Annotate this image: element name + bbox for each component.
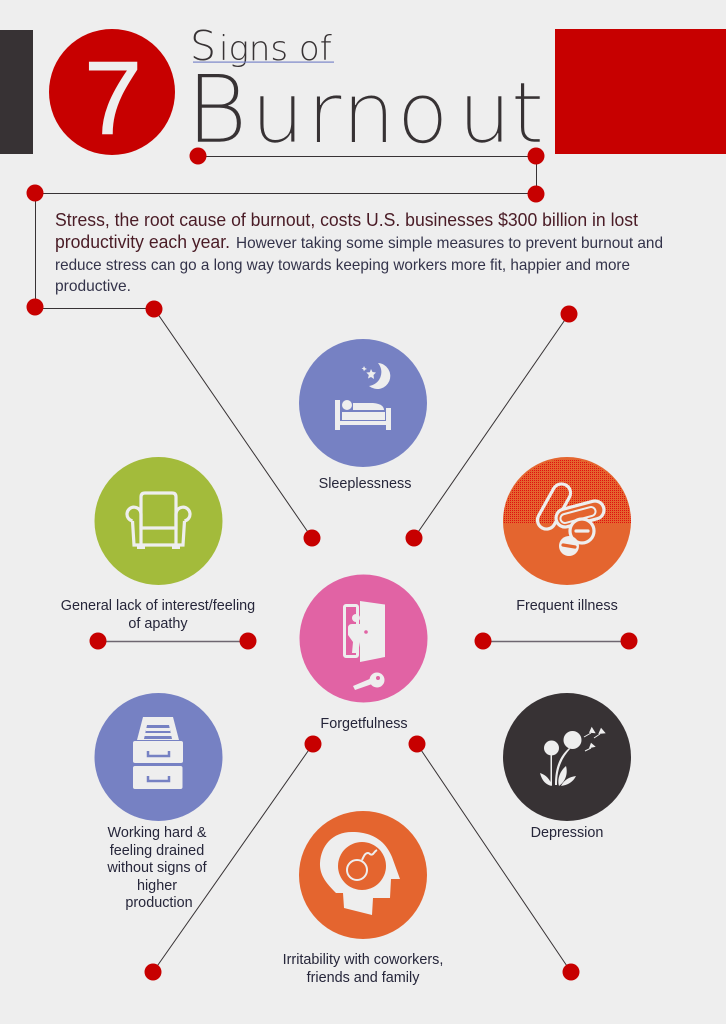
icon: pills [534,481,606,556]
intro paragraph: productive. [55,278,131,295]
label: Forgetfulness [320,716,408,732]
intro paragraph [55,210,663,295]
icon: head with bomb [320,832,400,915]
label: higher [137,878,177,894]
intro paragraph: However taking some simple measures to prevent burnout and [236,235,663,252]
icon: armchair [127,493,190,547]
sign: sleeplessness [299,339,427,492]
icon: file drawers [133,717,183,789]
title [186,22,544,165]
title: S [190,22,216,70]
sign: irritability [283,811,443,986]
label: friends and family [307,970,420,986]
label [106,825,208,911]
label: Irritability with coworkers, [283,952,443,968]
label [283,952,443,986]
connector lines [36,156,629,972]
title: urnout [251,64,544,162]
title: igns of [219,29,332,69]
intro paragraph: Stress, the root cause of burnout, costs U.S. businesses $300 billion in lost [55,210,638,230]
intro paragraph: reduce stress can go a long way towards keeping workers more fit, happier and more [55,257,630,274]
sign: forgetfulness [300,574,428,732]
label: without signs of [106,860,208,876]
label: production [125,895,193,911]
intro paragraph: productivity each year. [55,232,230,252]
right red block [555,29,726,154]
sign: working hard [94,693,222,911]
label [61,598,255,632]
sign: frequent illness [503,457,631,614]
label: General lack of interest/feeling [61,598,255,614]
label: Working hard & [108,825,207,841]
number seven badge: 7 [84,41,142,157]
sign: depression [503,693,631,841]
left dark bar [0,30,33,154]
title: B [186,56,248,165]
icon: dandelion [540,727,606,786]
label: Sleeplessness [319,476,411,492]
label: Depression [531,825,603,841]
label: Frequent illness [516,598,618,614]
label: feeling drained [110,843,204,859]
number seven badge [49,29,175,157]
label: of apathy [128,616,188,632]
icon: door and key [344,601,385,690]
sign: apathy [61,457,255,632]
icon: bed and moon [335,363,391,430]
connector dots [26,148,638,980]
